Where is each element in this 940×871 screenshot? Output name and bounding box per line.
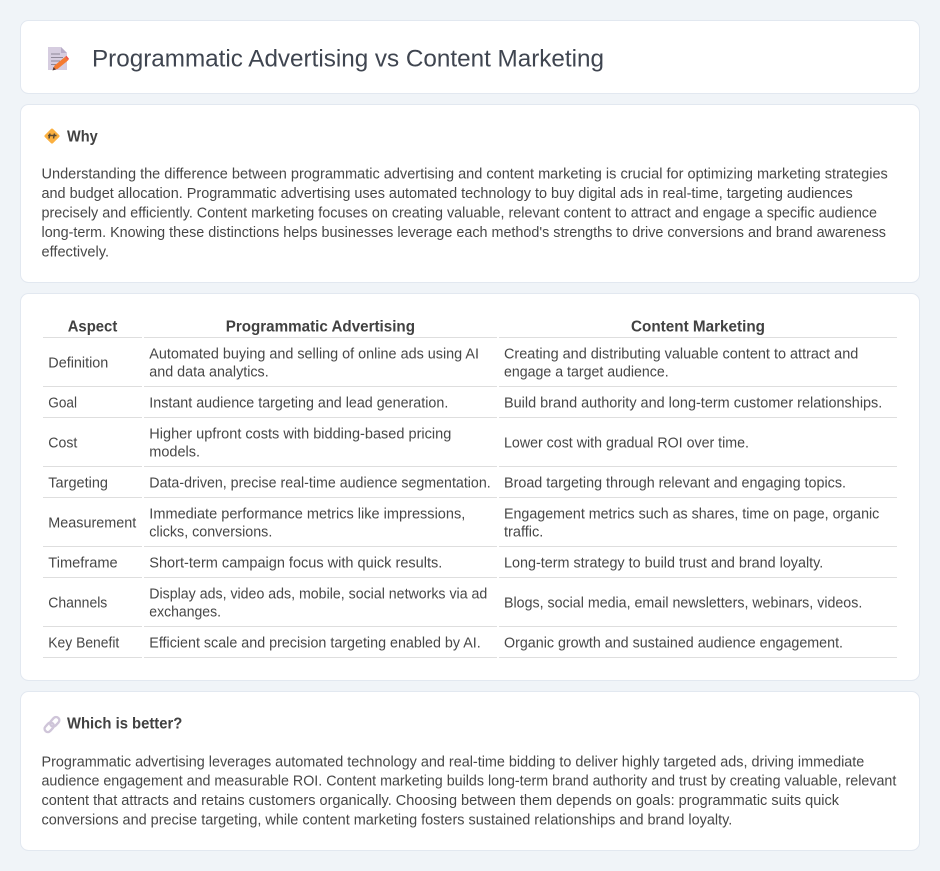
panel: comparison table (20, 294, 920, 680)
panel: which is better (20, 692, 920, 850)
row: targeting (43, 476, 897, 498)
row: definition: engage a target audience. (504, 364, 669, 380)
row: measurement (43, 506, 897, 546)
row: definition: Automated buying and selling of online ads using AI (149, 346, 479, 362)
row: timeframe: Timeframe (48, 556, 118, 572)
row: channels (43, 586, 897, 626)
icon: orange diamond sign (44, 128, 60, 144)
row: timeframe (43, 556, 897, 578)
table header row: Aspect (68, 319, 118, 336)
row: goal: Instant audience targeting and lead generation. (149, 396, 448, 412)
table header row (43, 319, 897, 338)
row: definition: and data analytics. (149, 364, 269, 380)
icon: chain link (43, 716, 61, 733)
text block: why paragraph: and budget allocation. Programmatic advertising uses automated technology to buy digital ads in real-time, targeting audiences (42, 186, 853, 202)
row: timeframe: Short-term campaign focus with quick results. (149, 556, 442, 572)
row: key benefit (43, 636, 897, 658)
row: channels: Blogs, social media, email newsletters, webinars, videos. (504, 596, 862, 612)
panel: why (20, 104, 920, 282)
text block: why paragraph: effectively. (42, 244, 109, 260)
row: measurement: clicks, conversions. (149, 524, 272, 540)
row: targeting: Data-driven, precise real-time audience segmentation. (149, 476, 491, 492)
row: cost: Lower cost with gradual ROI over time. (504, 436, 749, 452)
text block: which is better paragraph (42, 754, 896, 829)
row: targeting: Broad targeting through relevant and engaging topics. (504, 476, 846, 492)
row: key benefit: Organic growth and sustained audience engagement. (504, 636, 843, 652)
row: targeting: Targeting (48, 476, 108, 492)
text block: why paragraph (42, 167, 888, 260)
row: cost (43, 426, 897, 466)
row: channels: Display ads, video ads, mobile, social networks via ad (149, 586, 487, 602)
row: definition (43, 346, 897, 386)
row: cost: Cost (48, 436, 77, 452)
row: key benefit: Efficient scale and precision targeting enabled by AI. (149, 636, 481, 652)
text block: which is better paragraph: content that attracts and retains customers organically. Choosing between them depends on goals: programmatic suits quick (42, 793, 840, 809)
text block: which is better paragraph: audience engagement and measurable ROI. Content marketing builds long-term brand authority and trust by creating valuable, relevant (42, 774, 896, 790)
row: channels: exchanges. (149, 604, 221, 620)
row: goal: Goal (48, 396, 77, 412)
text block: why paragraph: Understanding the difference between programmatic advertising and content marketing is crucial for optimizing marketing strategies (42, 167, 888, 183)
text block: why paragraph: long-term. Knowing these distinctions helps businesses leverage each method's strengths to drive conversions and brand awareness (42, 225, 886, 241)
text block: why paragraph: precisely and efficiently. Content marketing focuses on creating valuable, relevant content to attract and engage a specific audience (42, 206, 877, 222)
row: measurement: Measurement (48, 516, 136, 532)
table header row: Content Marketing (631, 319, 765, 336)
row: cost: models. (149, 444, 200, 460)
heading: why: Why (67, 129, 98, 146)
row: cost: Higher upfront costs with bidding-based pricing (149, 426, 451, 442)
row: timeframe: Long-term strategy to build trust and brand loyalty. (504, 556, 823, 572)
panel: title header (20, 20, 920, 94)
row: measurement: Engagement metrics such as shares, time on page, organic (504, 506, 879, 522)
heading: which is better: Which is better? (67, 716, 182, 733)
row: measurement: traffic. (504, 524, 543, 540)
row: definition: Definition (48, 356, 108, 372)
title: Programmatic Advertising vs Content Marketing (92, 46, 604, 72)
row: goal: Build brand authority and long-term customer relationships. (504, 396, 882, 412)
row: definition: Creating and distributing valuable content to attract and (504, 346, 858, 362)
row: measurement: Immediate performance metrics like impressions, (149, 506, 465, 522)
text block: which is better paragraph: conversions and precise targeting, while content marketing fosters sustained relationships and brand loyalty. (42, 813, 732, 829)
table header row: Programmatic Advertising (226, 319, 415, 336)
text block: which is better paragraph: Programmatic advertising leverages automated technology and real-time bidding to deliver highly targeted ads, driving immediate (42, 754, 864, 770)
icon: document with pencil (48, 47, 69, 70)
row: key benefit: Key Benefit (48, 636, 119, 652)
row: channels: Channels (48, 596, 107, 612)
row: goal (43, 396, 897, 418)
